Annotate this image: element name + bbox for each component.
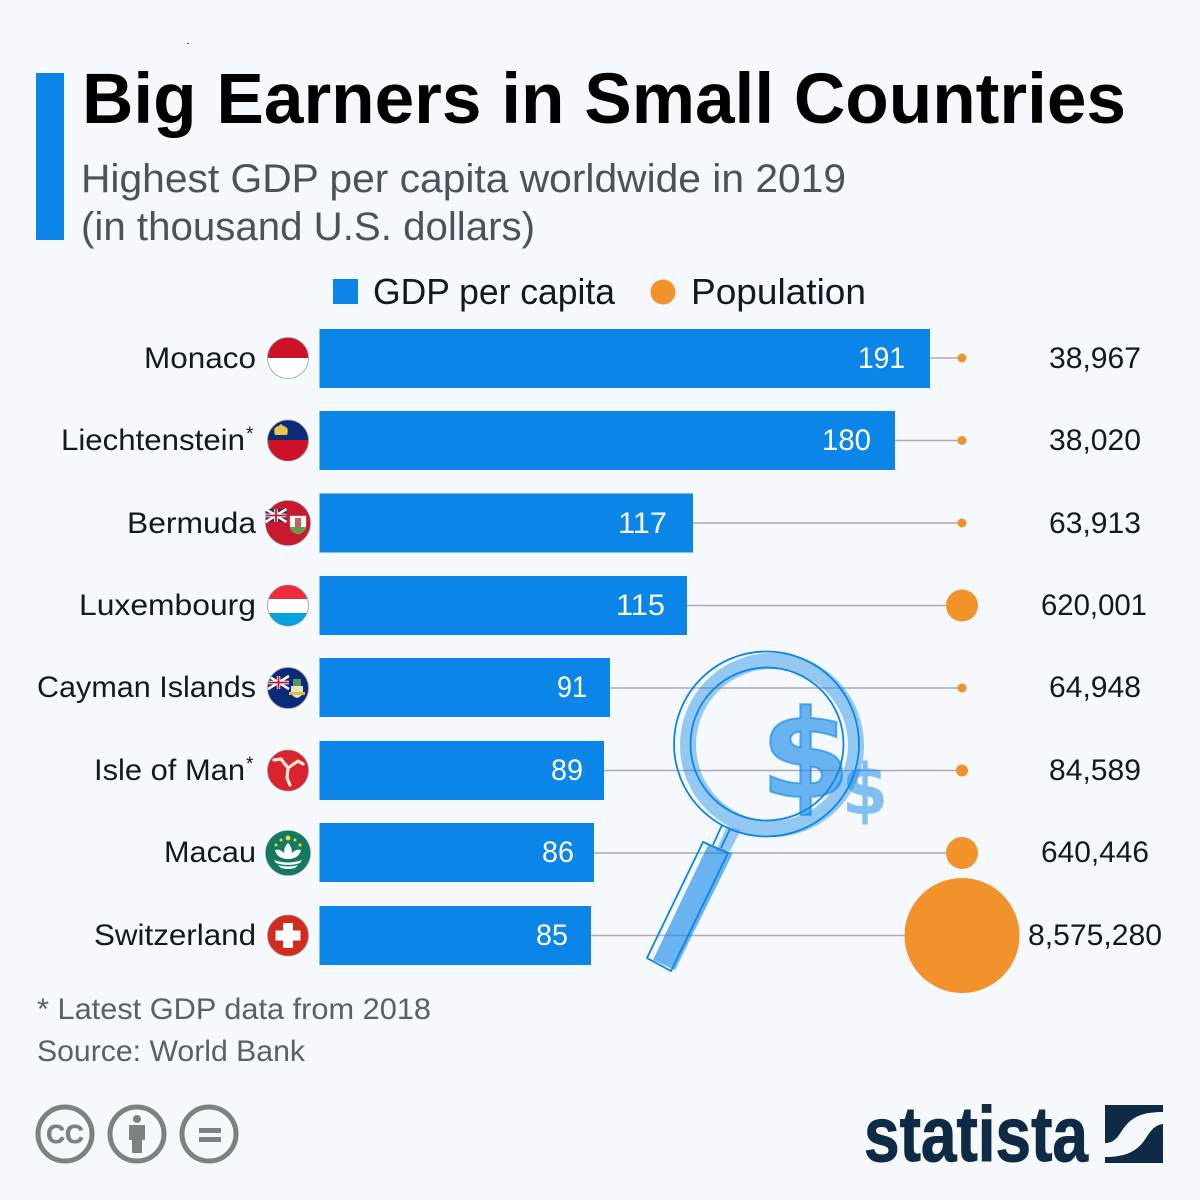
row: Switzerland	[94, 878, 1162, 993]
row: Monaco: Monaco	[144, 342, 256, 375]
row: Luxembourg	[79, 576, 1147, 635]
row: Switzerland: 85	[536, 919, 568, 952]
footnote and source: * Latest GDP data from 2018	[37, 993, 431, 1026]
row: Monaco: 191	[858, 342, 905, 375]
row: Liechtenstein: *	[246, 424, 254, 445]
row: Liechtenstein: 180	[822, 424, 871, 457]
row: Macau: Macau	[164, 836, 256, 869]
row: Luxembourg: 620,001	[1041, 589, 1147, 622]
row: Macau	[164, 823, 1149, 882]
row: Isle of Man: Isle of Man	[94, 754, 245, 787]
icon: magnifying glass with dollar signs: $	[760, 684, 851, 826]
icon: creative commons licence: CC	[46, 1119, 84, 1149]
bar chart	[37, 329, 1162, 993]
row: Luxembourg: 115	[616, 589, 665, 622]
row: Isle of Man	[94, 741, 1141, 800]
row: Isle of Man: 89	[551, 754, 583, 787]
icon: creative commons licence	[38, 1107, 236, 1161]
title: Big Earners in Small Countries	[82, 60, 1126, 139]
footnote and source: Source: World Bank	[37, 1035, 306, 1068]
row: Monaco	[144, 329, 1141, 388]
footnote and source	[37, 993, 431, 1068]
icon: magnifying glass with dollar signs: $	[842, 750, 888, 831]
row: Isle of Man: 84,589	[1049, 754, 1141, 787]
row: Monaco: 38,967	[1049, 342, 1141, 375]
icon: magnifying glass with dollar signs	[647, 652, 888, 971]
row: Liechtenstein	[61, 411, 1141, 470]
row: Switzerland: Switzerland	[94, 919, 256, 952]
row: Macau: 640,446	[1041, 836, 1149, 869]
row: Cayman Islands: 64,948	[1049, 671, 1141, 704]
legend	[333, 271, 866, 312]
row: Bermuda	[127, 494, 1141, 552]
row: Cayman Islands: Cayman Islands	[37, 671, 256, 704]
subtitle: (in thousand U.S. dollars)	[81, 205, 535, 249]
row: Bermuda: Bermuda	[127, 507, 257, 540]
row: Switzerland: 8,575,280	[1028, 919, 1162, 952]
row: Luxembourg: Luxembourg	[79, 589, 256, 622]
subtitle: Highest GDP per capita worldwide in 2019	[81, 157, 846, 201]
row: Liechtenstein: Liechtenstein	[61, 424, 245, 457]
accent bar	[36, 73, 64, 240]
subtitle	[81, 157, 846, 249]
row: Macau: 86	[542, 836, 574, 869]
legend: GDP per capita	[373, 271, 616, 312]
row: Bermuda: 117	[618, 507, 667, 540]
row: Cayman Islands	[37, 658, 1141, 717]
row: Liechtenstein: 38,020	[1049, 424, 1141, 457]
row: Bermuda: 63,913	[1049, 507, 1141, 540]
legend: Population	[691, 271, 866, 312]
logo: statista: statista	[864, 1090, 1088, 1178]
row: Isle of Man: *	[246, 754, 254, 775]
row: Cayman Islands: 91	[557, 671, 587, 704]
